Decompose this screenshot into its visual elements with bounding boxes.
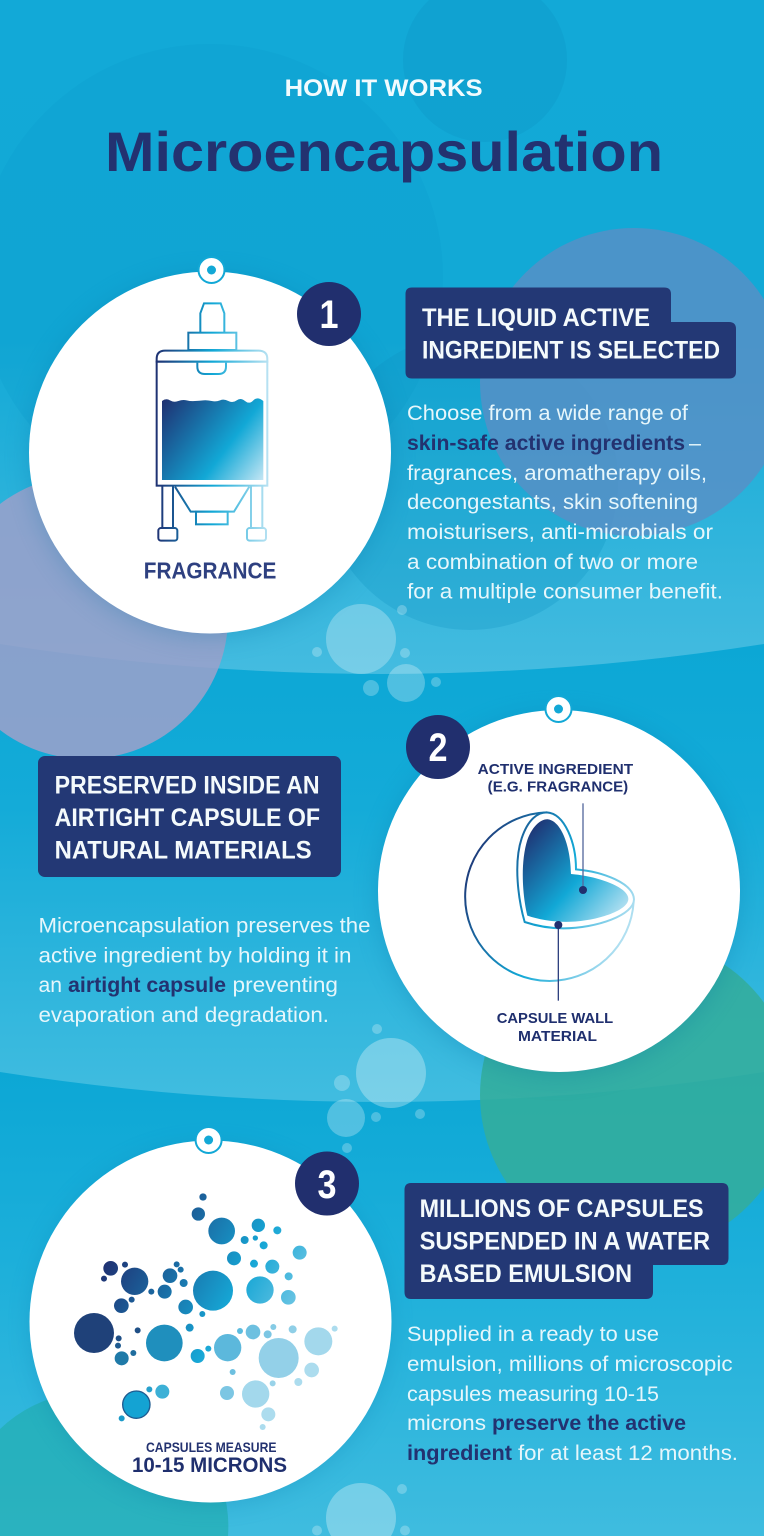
- number badge 3: 3: [318, 1163, 336, 1207]
- title: Microencapsulation: [105, 120, 663, 183]
- pin 2: [546, 696, 572, 722]
- caption: capsules measure: CAPSULES MEASURE: [146, 1439, 276, 1455]
- icon: capsule cluster: [74, 1193, 338, 1430]
- body text 2: airtight capsule: [68, 973, 226, 997]
- body text 3: microns: [407, 1411, 486, 1435]
- label: active ingredient: [478, 761, 633, 796]
- body text 3: ingredient: [407, 1441, 512, 1465]
- heading box 2: NATURAL MATERIALS: [55, 836, 312, 864]
- label: active ingredient: ACTIVE INGREDIENT: [478, 761, 633, 778]
- caption: capsules measure: 10-15 MICRONS: [132, 1454, 287, 1477]
- number badge 1: [297, 282, 361, 346]
- body text 3: capsules measuring 10-15: [407, 1382, 659, 1406]
- bubbles between step 2 and step 3: [327, 1024, 426, 1153]
- bubbles between step 1 and step 2: [312, 604, 441, 702]
- body text 3: Supplied in a ready to use: [407, 1322, 659, 1346]
- body text 1: for a multiple consumer benefit.: [407, 580, 723, 604]
- panel: step 1 circle: [29, 257, 391, 634]
- body text 1: –: [689, 431, 701, 455]
- body text 3: emulsion, millions of microscopic: [407, 1352, 733, 1376]
- icon: fragrance tank: [157, 303, 267, 541]
- body text 1: [407, 401, 723, 604]
- body text 2: active ingredient by holding it in: [38, 944, 352, 968]
- label: capsule wall material: MATERIAL: [518, 1028, 597, 1045]
- panel: step 2 circle: [378, 696, 740, 1073]
- number badge 1: 1: [320, 293, 338, 337]
- body text 2: Microencapsulation preserves the: [38, 914, 370, 938]
- body text 1: decongestants, skin softening: [407, 490, 698, 514]
- number badge 2: [406, 715, 470, 779]
- number badge 2: 2: [428, 726, 448, 770]
- heading box 3: [404, 1183, 728, 1299]
- heading box 3: BASED EMULSION: [420, 1260, 632, 1288]
- body text 2: preventing: [232, 973, 338, 997]
- heading box 2: PRESERVED INSIDE AN: [55, 772, 320, 800]
- body text 3: [407, 1322, 738, 1465]
- heading box 1: [406, 288, 736, 378]
- body text 1: Choose from a wide range of: [407, 401, 688, 425]
- heading box 2: AIRTIGHT CAPSULE OF: [55, 804, 320, 832]
- body text 2: evaporation and degradation.: [38, 1003, 329, 1027]
- pin 1: [198, 257, 224, 283]
- body text 1: a combination of two or more: [407, 550, 698, 574]
- label: active ingredient: (E.G. FRAGRANCE): [488, 778, 628, 796]
- body text 1: skin-safe active ingredients: [407, 431, 685, 455]
- body text 3: for at least 12 months.: [518, 1441, 738, 1465]
- heading box 2: [38, 756, 341, 877]
- label: capsule wall material: [497, 1010, 613, 1045]
- heading box 1: THE LIQUID ACTIVE: [422, 304, 650, 332]
- heading box 1: INGREDIENT IS SELECTED: [422, 336, 720, 364]
- icon: capsule cross-section: [465, 803, 634, 1001]
- pin 3: [196, 1127, 222, 1153]
- label: capsule wall material: CAPSULE WALL: [497, 1010, 613, 1027]
- caption: capsules measure: [132, 1439, 287, 1477]
- panel: step 3 circle: [30, 1127, 392, 1502]
- title kicker: HOW IT WORKS: [285, 75, 483, 102]
- body text 3: preserve the active: [492, 1411, 686, 1435]
- body text 1: fragrances, aromatherapy oils,: [407, 461, 707, 485]
- number badge 3: [295, 1152, 359, 1216]
- heading box 3: SUSPENDED IN A WATER: [420, 1228, 710, 1256]
- body text 1: moisturisers, anti-microbials or: [407, 520, 713, 544]
- bubbles at bottom: [312, 1483, 410, 1536]
- body text 2: an: [38, 973, 62, 997]
- body text 2: [38, 914, 370, 1027]
- label: fragrance: FRAGRANCE: [144, 558, 276, 584]
- heading box 3: MILLIONS OF CAPSULES: [420, 1195, 704, 1223]
